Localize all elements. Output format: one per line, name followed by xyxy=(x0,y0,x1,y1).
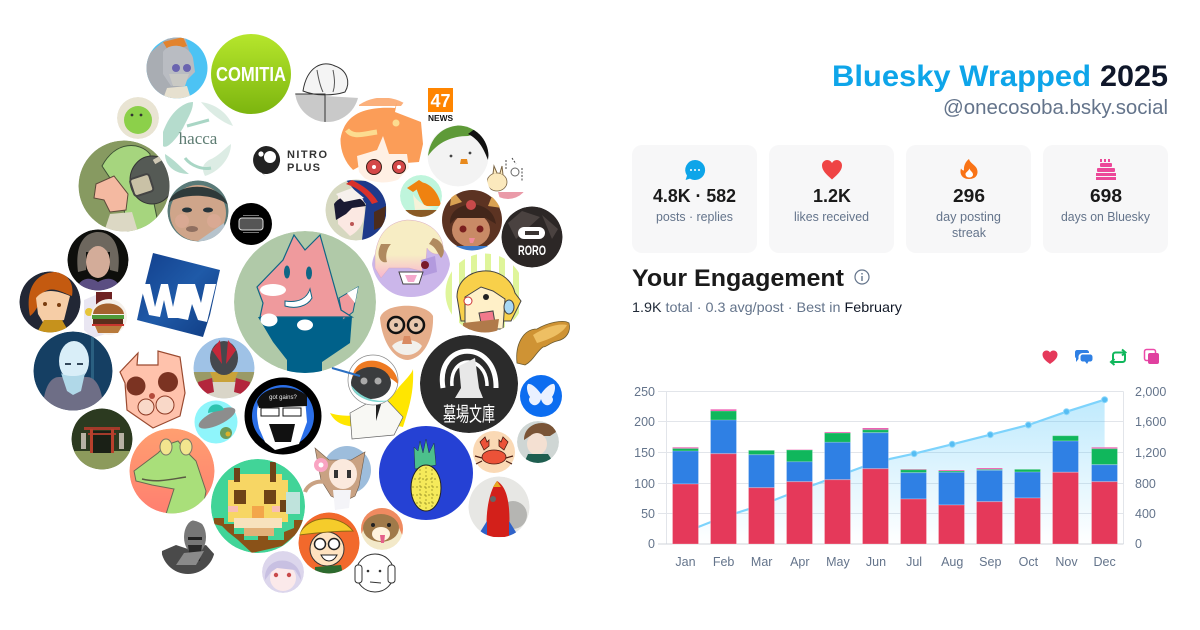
panel: stat card posting streak: 296 xyxy=(953,186,985,206)
heading: Your Engagement: Your Engagement xyxy=(632,265,844,292)
avatar: UFO xyxy=(194,400,238,444)
avatar: COMITIA logo xyxy=(211,34,291,114)
avatar: sunglasses man: got gains? xyxy=(269,395,298,401)
avatar: blonde crying character xyxy=(445,253,524,333)
avatar: otter xyxy=(361,508,403,550)
avatar: burger xyxy=(84,292,127,338)
month labels: Jul xyxy=(906,555,922,569)
right axis labels: 2,000 xyxy=(1135,385,1166,399)
right axis labels: 0 xyxy=(1135,537,1142,551)
avatar: monk with white beard xyxy=(34,332,112,411)
title: Bluesky Wrapped xyxy=(832,60,1091,93)
avatar: masked hero xyxy=(193,338,255,399)
month labels xyxy=(675,555,1116,569)
avatar: green bird xyxy=(117,97,159,139)
left axis labels xyxy=(634,385,655,551)
avatar: baked cuttlefish pastry xyxy=(517,321,570,365)
stacked bars xyxy=(672,409,1118,544)
left axis labels: 50 xyxy=(641,507,655,521)
right axis labels: 800 xyxy=(1135,477,1156,491)
month labels: Jan xyxy=(675,555,696,569)
panel: stat card posts and replies: 4.8K · 582 xyxy=(653,186,736,206)
avatar: COMITIA logo: COMITIA xyxy=(216,64,286,86)
right axis labels: 1,600 xyxy=(1135,415,1166,429)
month labels: Apr xyxy=(790,555,810,569)
month labels: Dec xyxy=(1093,555,1116,569)
avatar: baby photo xyxy=(168,180,228,242)
right axis labels: 1,200 xyxy=(1135,446,1166,460)
month labels: Sep xyxy=(979,555,1001,569)
avatar: scientist robot xyxy=(330,355,413,439)
cumulative area xyxy=(686,400,1105,544)
panel: stat card posts and replies xyxy=(632,145,757,253)
avatar: red rocket xyxy=(468,476,530,538)
panel: stat card posting streak: day posting xyxy=(936,210,1001,224)
avatar: pixel chick xyxy=(211,459,305,553)
logo: Nitro Plus: PLUS xyxy=(287,162,320,174)
avatar: green-haired character with headphones xyxy=(78,140,174,232)
logo: 47 News xyxy=(428,88,453,123)
month labels: Jun xyxy=(866,555,886,569)
avatar: cat-eared girl xyxy=(305,446,371,510)
avatar: graveyard library xyxy=(420,335,518,433)
month labels: Aug xyxy=(941,555,963,569)
month labels: Oct xyxy=(1019,555,1039,569)
icon: likes heart xyxy=(1042,350,1058,364)
avatar: kimono woman xyxy=(517,421,559,463)
month labels: Feb xyxy=(713,555,734,569)
avatar: hacca botanical xyxy=(158,99,236,177)
avatar: girl in red and blue xyxy=(326,180,386,240)
right axis labels: 400 xyxy=(1135,507,1156,521)
panel: stat card likes xyxy=(769,145,894,253)
panel: stat card likes: likes received xyxy=(794,210,869,224)
avatar: yellow-hat smiling character xyxy=(298,512,360,574)
avatar: RORO xyxy=(502,206,562,268)
left axis labels: 250 xyxy=(634,385,655,399)
engagement summary: 1.9K total · 0.3 avg/post · Best in February xyxy=(632,299,902,315)
panel: stat card likes: 1.2K xyxy=(813,186,851,206)
avatar: graveyard library: 墓場文庫 xyxy=(443,403,495,426)
avatar: rabbit mask drawing xyxy=(120,351,185,428)
panel: stat card posting streak xyxy=(906,145,1031,253)
avatar: orange parrot xyxy=(400,175,442,218)
avatar: black badge xyxy=(230,203,272,245)
icon: quotes copies xyxy=(1144,350,1159,364)
chart: monthly engagement stacked bars with cumulative line xyxy=(634,385,1166,569)
title: 2025 xyxy=(1100,60,1168,93)
avatar: RORO: RORO xyxy=(518,242,546,258)
left axis labels: 150 xyxy=(634,446,655,460)
month labels: May xyxy=(826,555,850,569)
avatar: man with round glasses xyxy=(380,306,433,360)
avatar: hacca botanical: hacca xyxy=(179,129,218,148)
cumulative line xyxy=(686,397,1108,532)
avatar bubble cluster xyxy=(20,34,570,593)
avatar: orange-haired character xyxy=(20,272,80,334)
icon: birthday cake xyxy=(1096,159,1116,180)
avatar: brown-haired girl with ears xyxy=(442,190,502,251)
left axis labels: 200 xyxy=(634,415,655,429)
avatar: sunglasses man xyxy=(244,378,322,454)
avatar: small sketch rabbit xyxy=(487,158,524,199)
icon: reposts xyxy=(1111,350,1126,365)
avatar: headphones outline face xyxy=(355,554,395,592)
avatar: pineapple xyxy=(379,426,473,520)
left axis labels: 100 xyxy=(634,477,655,491)
avatar: silver-haired character xyxy=(146,37,208,99)
logo: Nitro Plus: NITRO xyxy=(287,149,327,161)
panel: stat card days on Bluesky: 698 xyxy=(1090,186,1122,206)
panel: stat card posts and replies: posts · replies xyxy=(656,210,733,224)
logo: 47 News: 47 xyxy=(430,91,451,111)
icon: replies bubbles xyxy=(1075,350,1092,364)
avatar: red crab xyxy=(473,431,515,473)
icon: info xyxy=(855,270,869,284)
month labels: Nov xyxy=(1055,555,1078,569)
icon: chat bubble xyxy=(685,160,705,180)
panel: stat card posting streak: streak xyxy=(952,226,987,240)
left axis labels: 0 xyxy=(648,537,655,551)
logo: 47 News: NEWS xyxy=(428,113,453,123)
panel: stat card days on Bluesky: days on Bluesky xyxy=(1061,210,1151,224)
right axis labels xyxy=(1135,385,1166,551)
avatar: lavender-haired girl xyxy=(262,551,304,593)
avatar: grayscale figure xyxy=(161,520,215,574)
chart legend xyxy=(1042,350,1159,365)
panel: stat card days on Bluesky xyxy=(1043,145,1168,253)
avatar: torii gate xyxy=(72,408,132,470)
avatar: Bluesky butterfly xyxy=(520,375,562,417)
logo: WN weather news xyxy=(137,253,220,337)
avatar: crocodile xyxy=(130,428,214,514)
icon: heart xyxy=(822,160,842,180)
month labels: Mar xyxy=(751,555,772,569)
icon: flame xyxy=(960,159,978,179)
avatar: dark-haired person xyxy=(68,230,128,292)
avatar: large pink fox character xyxy=(234,231,376,373)
logo: Nitro Plus xyxy=(253,146,327,176)
avatar: lamb girl with pink hair xyxy=(372,218,450,298)
avatar: orange-haired anime character xyxy=(340,98,426,183)
avatar: white bird with green hat xyxy=(428,125,490,186)
handle: @onecosoba.bsky.social xyxy=(943,97,1168,119)
avatar: sketch of sleeping figure xyxy=(295,58,359,122)
